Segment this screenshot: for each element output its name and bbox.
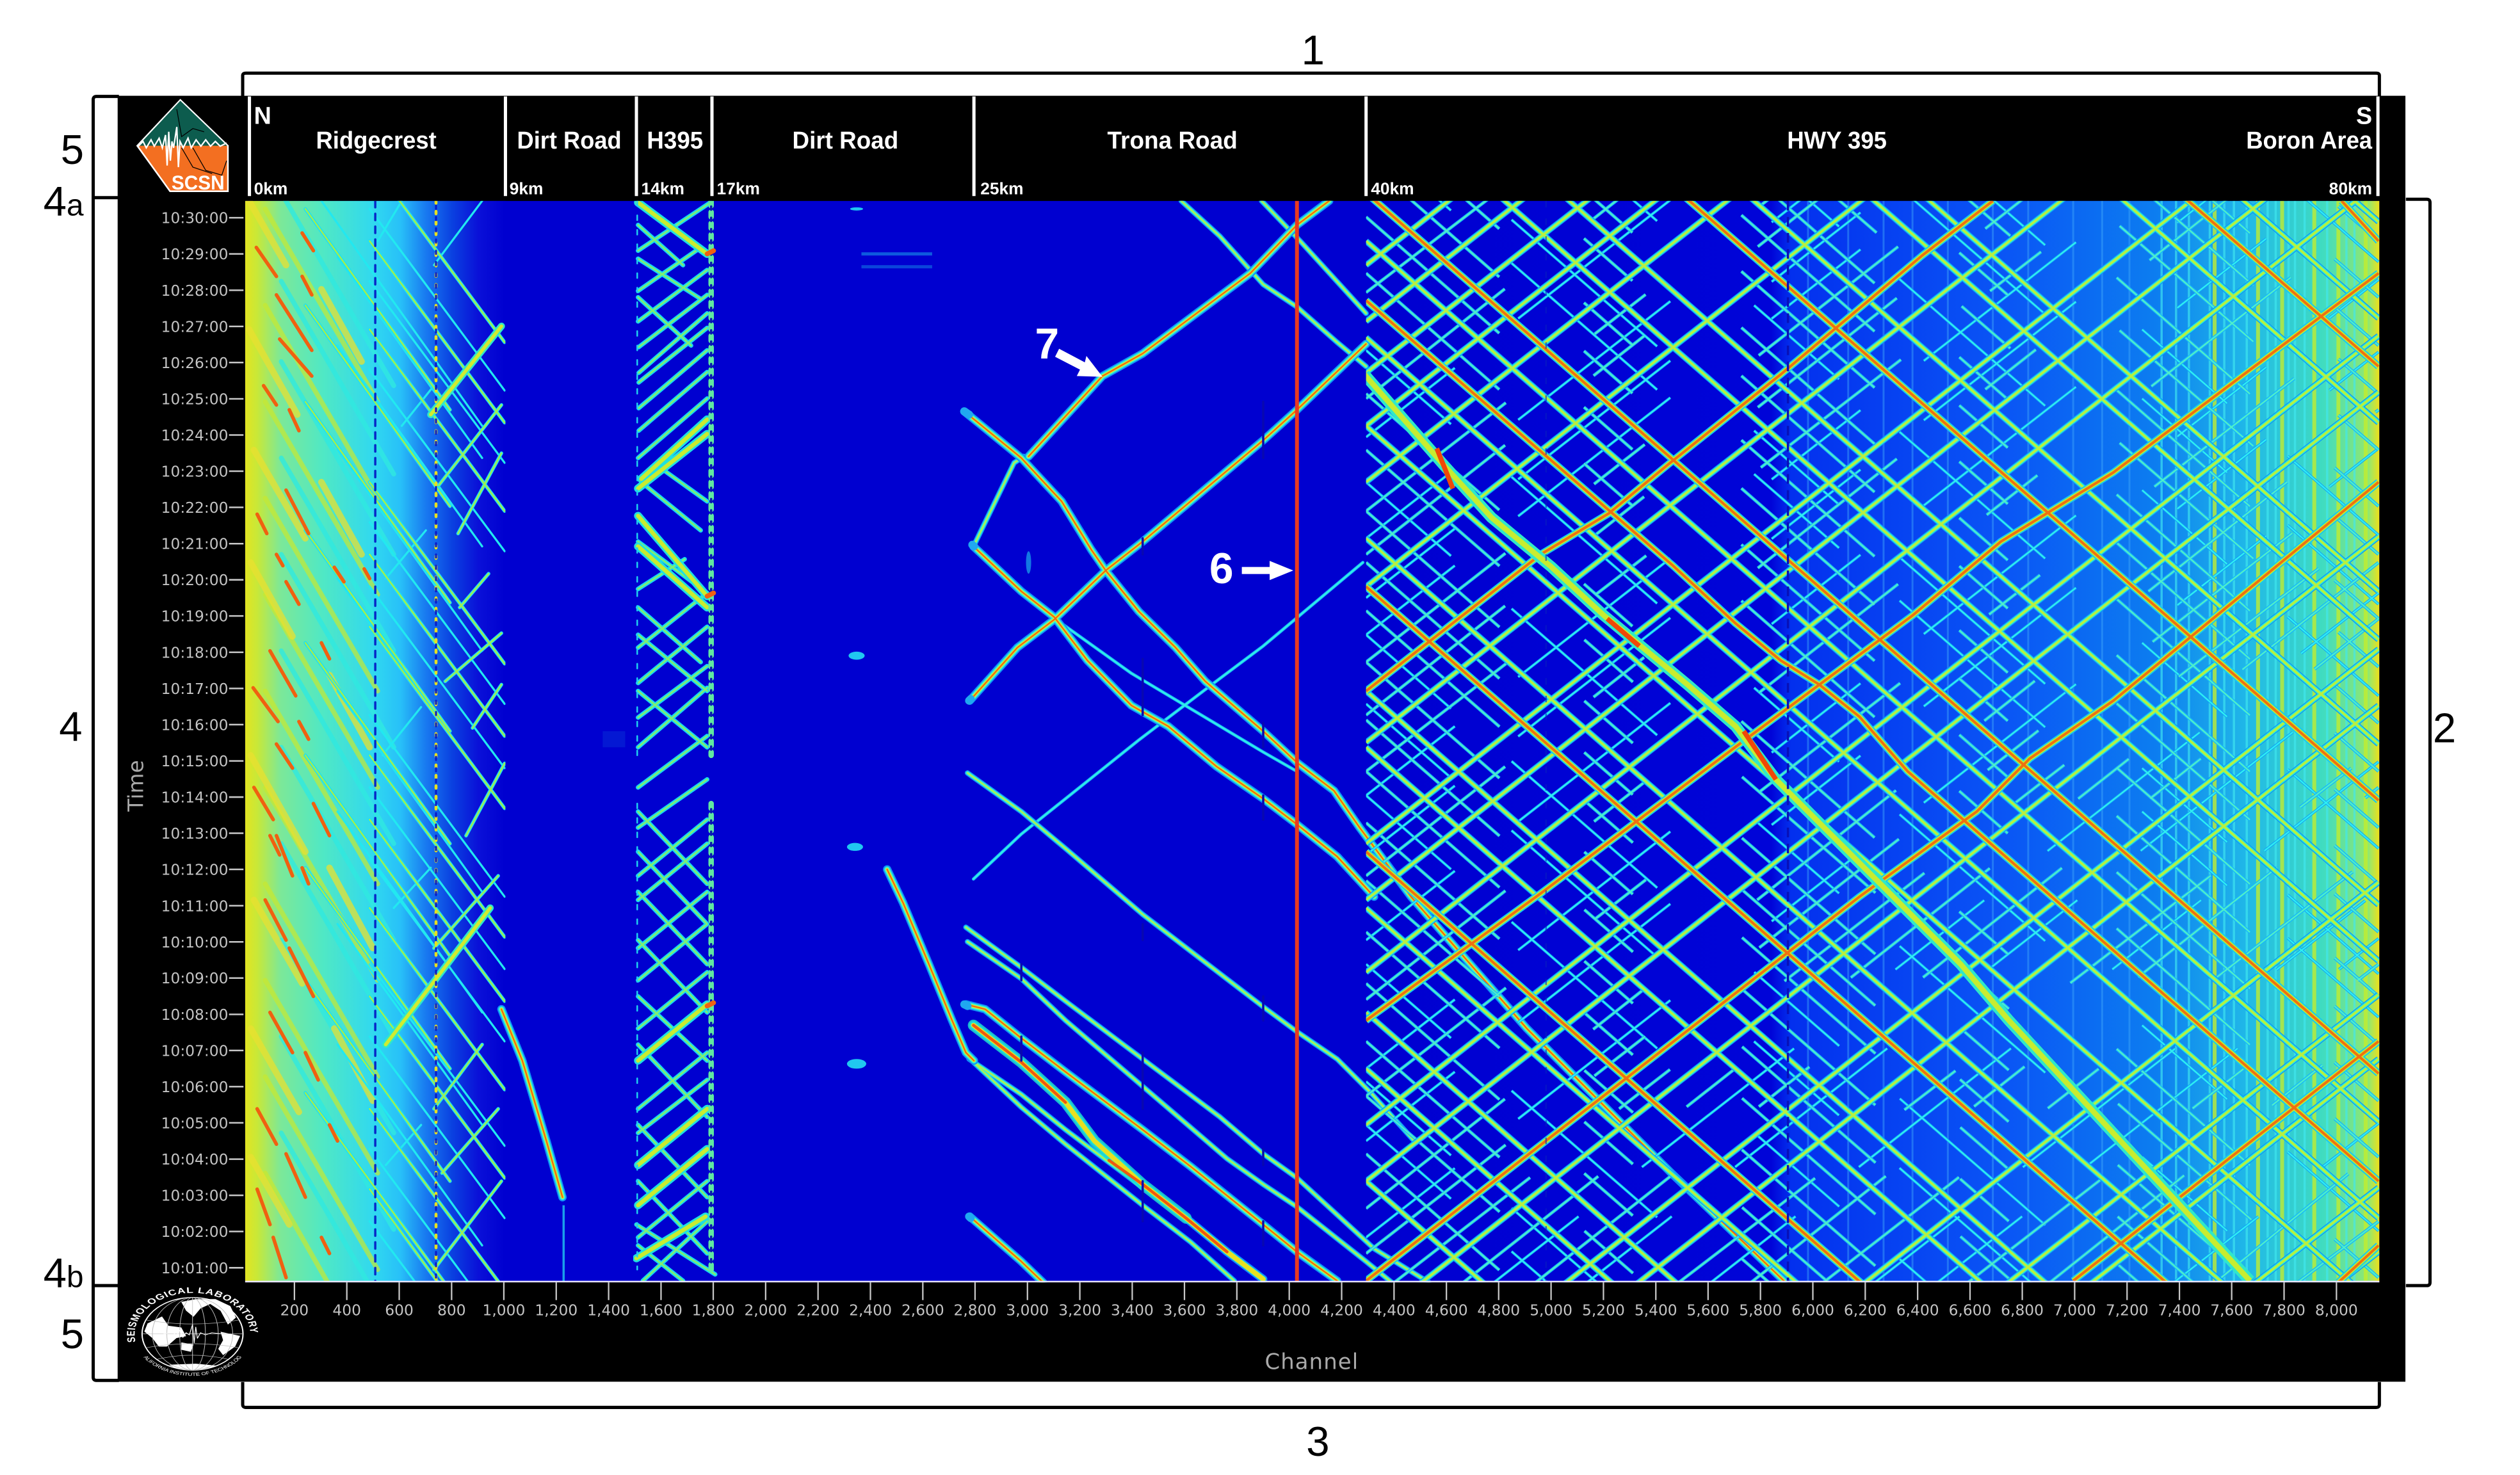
y axis: time labels: 10:03:00 <box>161 1187 228 1205</box>
y axis: time labels: 10:29:00 <box>161 245 228 263</box>
header labels: Dirt Road <box>517 127 622 154</box>
header separators <box>250 97 2378 196</box>
y axis: time labels: 10:21:00 <box>161 535 228 553</box>
x axis: channel labels: 600 <box>385 1302 414 1319</box>
number 5 lower: 5 <box>61 1310 84 1357</box>
x axis: channel labels: 3,200 <box>1058 1302 1101 1319</box>
callout 6: 6 <box>1209 545 1234 593</box>
header labels: H395 <box>647 127 703 154</box>
x axis: channel labels: 2,000 <box>744 1302 787 1319</box>
y axis: time labels: 10:17:00 <box>161 680 228 698</box>
section: dirt road glitches <box>563 207 1031 1282</box>
x axis: channel labels: 6,600 <box>1949 1302 1991 1319</box>
section: HWY 395 vehicle tracks <box>1366 201 2379 1283</box>
x axis: channel labels: 5,600 <box>1686 1302 1729 1319</box>
number 5 upper: 5 <box>61 126 84 173</box>
x axis: channel labels: 5,000 <box>1530 1302 1572 1319</box>
bracket 1: top <box>243 73 2379 97</box>
section: Ridgecrest traffic <box>249 161 505 1286</box>
black plot frame <box>118 96 2405 1382</box>
logo: Seismological Laboratory <box>127 1287 259 1376</box>
logo: Seismological Laboratory: CALIFORNIA INSTITUTE OF TECHNOLOGY <box>143 1356 241 1376</box>
number 2: 2 <box>2433 705 2456 752</box>
header labels: 40km <box>1371 179 1414 198</box>
x axis: channel labels: 3,400 <box>1111 1302 1154 1319</box>
y axis: time labels: 10:09:00 <box>161 969 228 987</box>
y axis: time labels: 10:06:00 <box>161 1078 228 1096</box>
x axis: channel labels: 3,600 <box>1163 1302 1206 1319</box>
x axis: channel labels <box>280 1302 2358 1319</box>
panel: waterfall heatmap <box>245 201 2379 1283</box>
y axis: time labels: 10:30:00 <box>161 209 228 227</box>
y axis: time labels: 10:11:00 <box>161 897 228 915</box>
label 4b: 4b <box>44 1250 84 1296</box>
y axis: time labels: 10:15:00 <box>161 752 228 770</box>
x axis title: Channel <box>1265 1350 1358 1374</box>
arrow 6 <box>1242 561 1293 580</box>
x axis: channel labels: 3,800 <box>1215 1302 1258 1319</box>
x axis: channel labels: 2,800 <box>954 1302 996 1319</box>
label 4a: 4a <box>44 177 84 224</box>
y axis: time labels: 10:01:00 <box>161 1259 228 1277</box>
plot bottom edge <box>245 1281 2379 1283</box>
header labels <box>254 102 2373 198</box>
header labels: S <box>2356 102 2372 129</box>
y axis: time labels: 10:20:00 <box>161 571 228 589</box>
y axis: time labels: 10:25:00 <box>161 391 228 408</box>
y axis: time labels <box>161 209 228 1277</box>
x axis: channel labels: 2,200 <box>796 1302 839 1319</box>
y axis: time labels: 10:12:00 <box>161 861 228 879</box>
x axis: channel labels: 1,200 <box>535 1302 578 1319</box>
x axis: channel labels: 1,400 <box>587 1302 630 1319</box>
x axis: channel labels: 7,600 <box>2210 1302 2253 1319</box>
arrow 7 <box>1055 349 1102 377</box>
y axis: time labels: 10:02:00 <box>161 1223 228 1241</box>
header labels: Ridgecrest <box>316 127 437 154</box>
bracket 2: right <box>2406 199 2430 1286</box>
header labels: 0km <box>254 179 287 198</box>
x axis: channel labels: 5,800 <box>1739 1302 1782 1319</box>
x axis: channel labels: 5,400 <box>1635 1302 1677 1319</box>
y axis: time labels: 10:14:00 <box>161 789 228 807</box>
x axis: channel labels: 1,600 <box>640 1302 682 1319</box>
y axis: time labels: 10:05:00 <box>161 1114 228 1132</box>
x axis: channel labels: 4,600 <box>1425 1302 1468 1319</box>
logo: SCSN <box>137 100 228 194</box>
x axis: channel labels: 4,400 <box>1373 1302 1416 1319</box>
x axis: channel labels: 7,000 <box>2053 1302 2096 1319</box>
x axis: channel labels: 7,400 <box>2158 1302 2201 1319</box>
section: Trona Road vehicle tracks <box>501 201 1784 1282</box>
number 3: 3 <box>1306 1418 1330 1465</box>
header labels: 17km <box>717 179 760 198</box>
number 1: 1 <box>1302 26 1325 73</box>
x axis: channel labels: 4,000 <box>1268 1302 1311 1319</box>
x axis: channel labels: 6,200 <box>1844 1302 1887 1319</box>
header labels: Trona Road <box>1108 127 1238 154</box>
x axis: channel labels: 3,000 <box>1006 1302 1049 1319</box>
section: H395 traffic <box>636 201 715 1281</box>
callout 7: 7 <box>1035 320 1059 368</box>
y axis: time labels: 10:19:00 <box>161 608 228 625</box>
y axis title: Time <box>124 760 148 812</box>
y axis: time labels: 10:08:00 <box>161 1006 228 1024</box>
header labels: Dirt Road <box>793 127 898 154</box>
y axis: time labels: 10:16:00 <box>161 716 228 734</box>
header labels: Boron Area <box>2246 127 2373 154</box>
y axis: time labels: 10:24:00 <box>161 426 228 444</box>
callout 7 <box>1035 320 1102 377</box>
header labels: 25km <box>980 179 1024 198</box>
header labels: 80km <box>2329 179 2372 198</box>
x axis: channel labels: 6,400 <box>1896 1302 1939 1319</box>
x axis: channel labels: 6,800 <box>2001 1302 2044 1319</box>
callout 6 <box>1209 545 1293 593</box>
header labels: 9km <box>510 179 543 198</box>
bracket 5 and 4: left <box>93 97 119 1380</box>
x axis: channel labels: 4,200 <box>1320 1302 1363 1319</box>
x axis: ticks <box>295 1282 2336 1300</box>
x axis: channel labels: 400 <box>332 1302 361 1319</box>
x axis: channel labels: 2,600 <box>901 1302 944 1319</box>
logo: SCSN: SCSN <box>172 172 225 194</box>
y axis: time labels: 10:18:00 <box>161 643 228 661</box>
y axis: time labels: 10:27:00 <box>161 318 228 335</box>
header labels: HWY 395 <box>1787 127 1887 154</box>
header labels: 14km <box>642 179 684 198</box>
x axis: channel labels: 2,400 <box>849 1302 892 1319</box>
x axis: channel labels: 1,000 <box>483 1302 525 1319</box>
header labels: N <box>254 102 271 129</box>
x axis: channel labels: 1,800 <box>692 1302 734 1319</box>
red dead channel line <box>1295 201 1299 1282</box>
y axis: time labels: 10:04:00 <box>161 1150 228 1168</box>
logo: Seismological Laboratory: SEISMOLOGICAL LABORATORY <box>127 1287 259 1342</box>
y axis: time labels: 10:07:00 <box>161 1042 228 1060</box>
number 4: 4 <box>59 703 83 750</box>
y axis: time labels: 10:26:00 <box>161 354 228 372</box>
x axis: channel labels: 800 <box>437 1302 466 1319</box>
y axis: time labels: 10:28:00 <box>161 282 228 300</box>
y axis: time labels: 10:10:00 <box>161 933 228 951</box>
x axis: channel labels: 8,000 <box>2315 1302 2358 1319</box>
x axis: channel labels: 5,200 <box>1582 1302 1625 1319</box>
y axis: time labels: 10:23:00 <box>161 463 228 481</box>
x axis: channel labels: 200 <box>280 1302 309 1319</box>
x axis: channel labels: 7,800 <box>2263 1302 2306 1319</box>
y axis: time labels: 10:22:00 <box>161 499 228 517</box>
x axis: channel labels: 7,200 <box>2106 1302 2149 1319</box>
y axis: ticks <box>229 218 243 1268</box>
x axis: channel labels: 4,800 <box>1477 1302 1520 1319</box>
x axis: channel labels: 6,000 <box>1791 1302 1834 1319</box>
bracket 3: bottom <box>243 1382 2379 1407</box>
y axis: time labels: 10:13:00 <box>161 825 228 842</box>
